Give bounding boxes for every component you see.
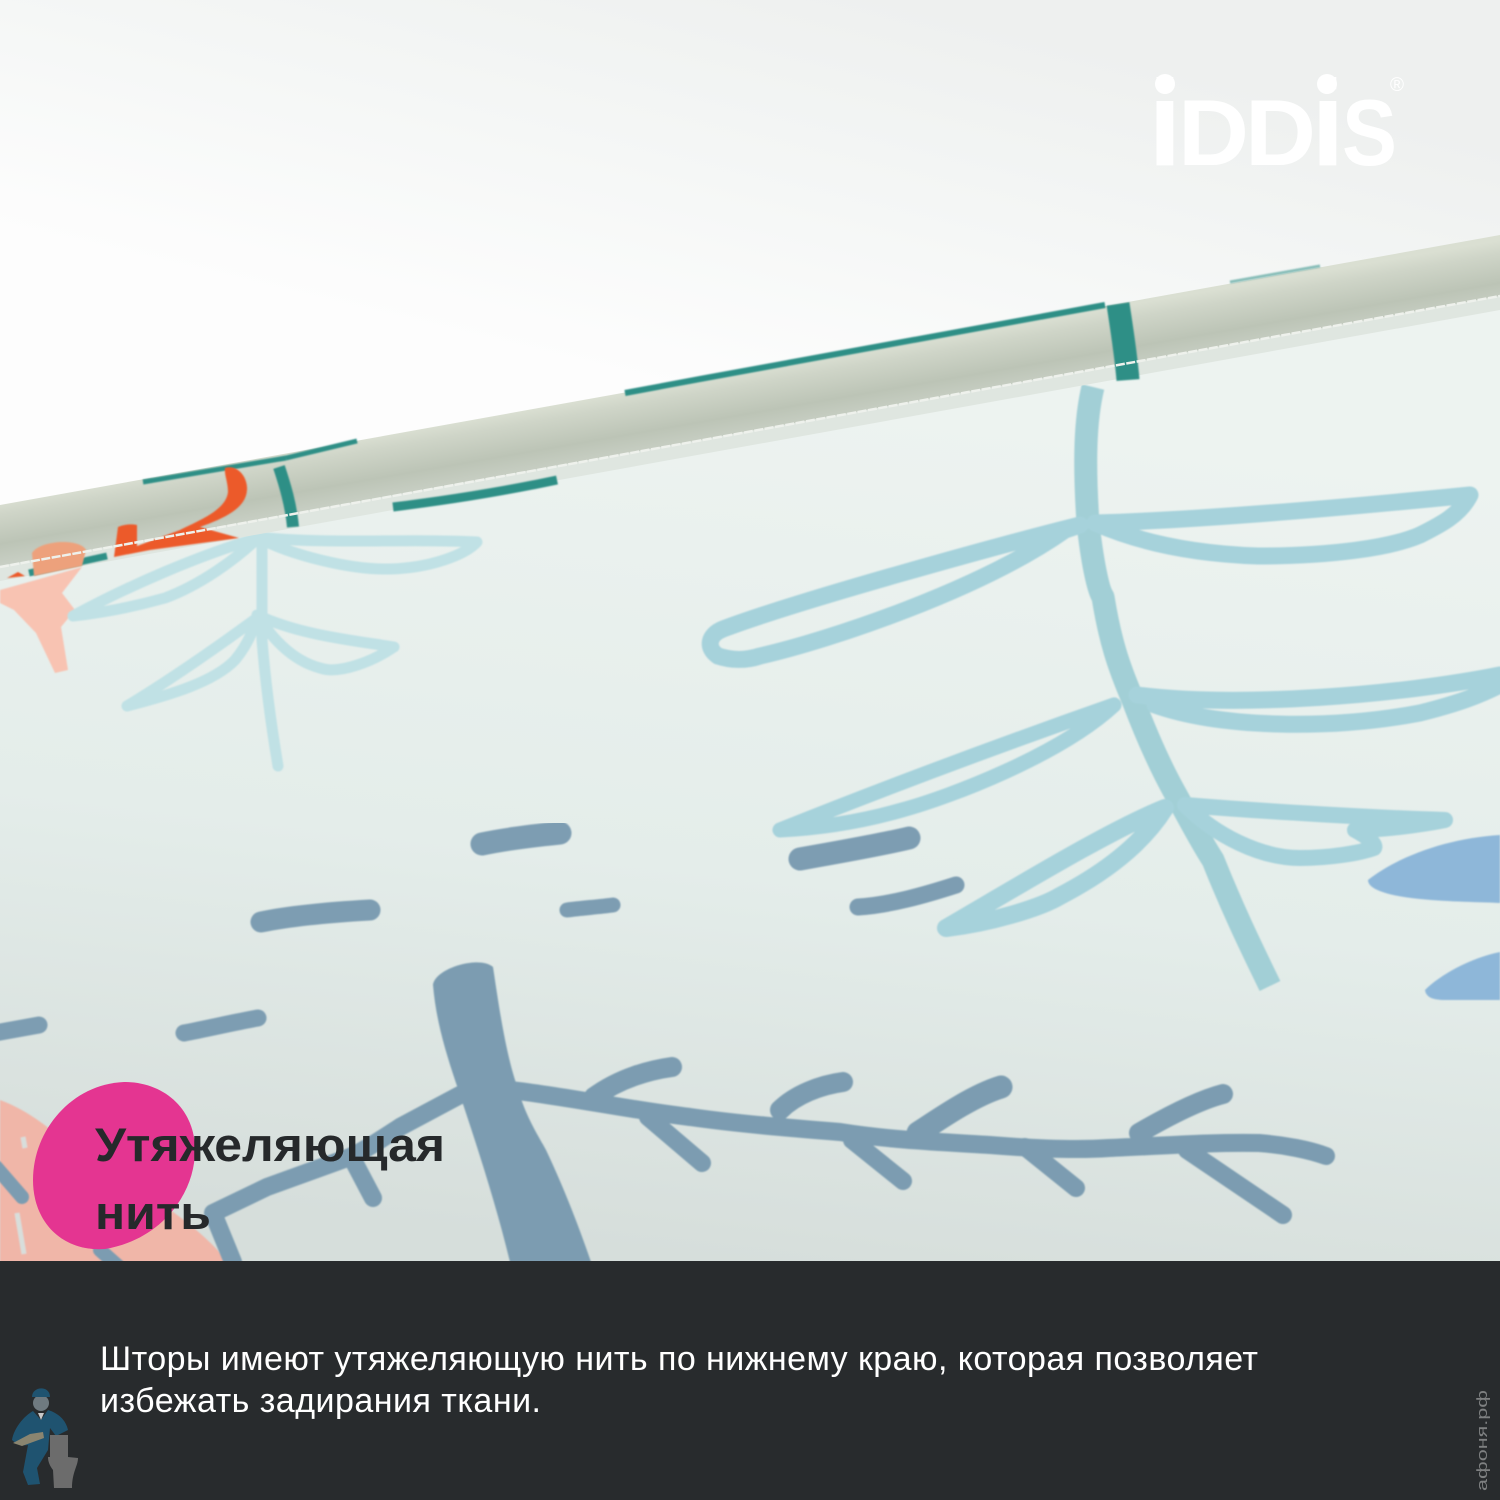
hem flap below the stitching	[0, 296, 1500, 581]
heading: Утяжеляющая	[95, 1118, 445, 1171]
icon: plumber with toilet	[12, 1388, 78, 1488]
pink blob behind heading	[33, 1082, 195, 1249]
bottom dark panel	[0, 1261, 1500, 1500]
blue blobs, right edge	[1368, 835, 1500, 1000]
grey-blue dashes	[0, 833, 956, 1033]
body text: Шторы имеют утяжеляющую нить по нижнему краю, которая позволяет	[100, 1340, 1258, 1378]
tree trunk and branches	[0, 962, 1326, 1266]
logo: IDDIS: D	[1245, 80, 1316, 185]
heading: нить	[95, 1186, 211, 1239]
background: white surface	[0, 0, 1500, 620]
logo: IDDIS: ®	[1390, 75, 1404, 96]
coral print, left edge	[0, 567, 228, 1262]
logo: IDDIS: i	[1148, 55, 1182, 191]
logo: IDDIS	[1148, 55, 1404, 191]
teal print on hem	[29, 266, 1320, 573]
orange print on hem	[7, 467, 247, 578]
large leaf branch	[710, 387, 1500, 986]
logo: IDDIS: i	[1311, 55, 1345, 191]
logo: IDDIS: D	[1178, 80, 1249, 185]
small leaf sprig	[73, 537, 477, 766]
hem: folded fabric edge	[0, 235, 1500, 581]
stitching line	[0, 296, 1500, 567]
curtain fabric	[0, 310, 1500, 1266]
logo: IDDIS: S	[1342, 80, 1397, 185]
body text: избежать задирания ткани.	[100, 1382, 541, 1420]
watermark: афоня.рф	[1474, 1390, 1491, 1491]
